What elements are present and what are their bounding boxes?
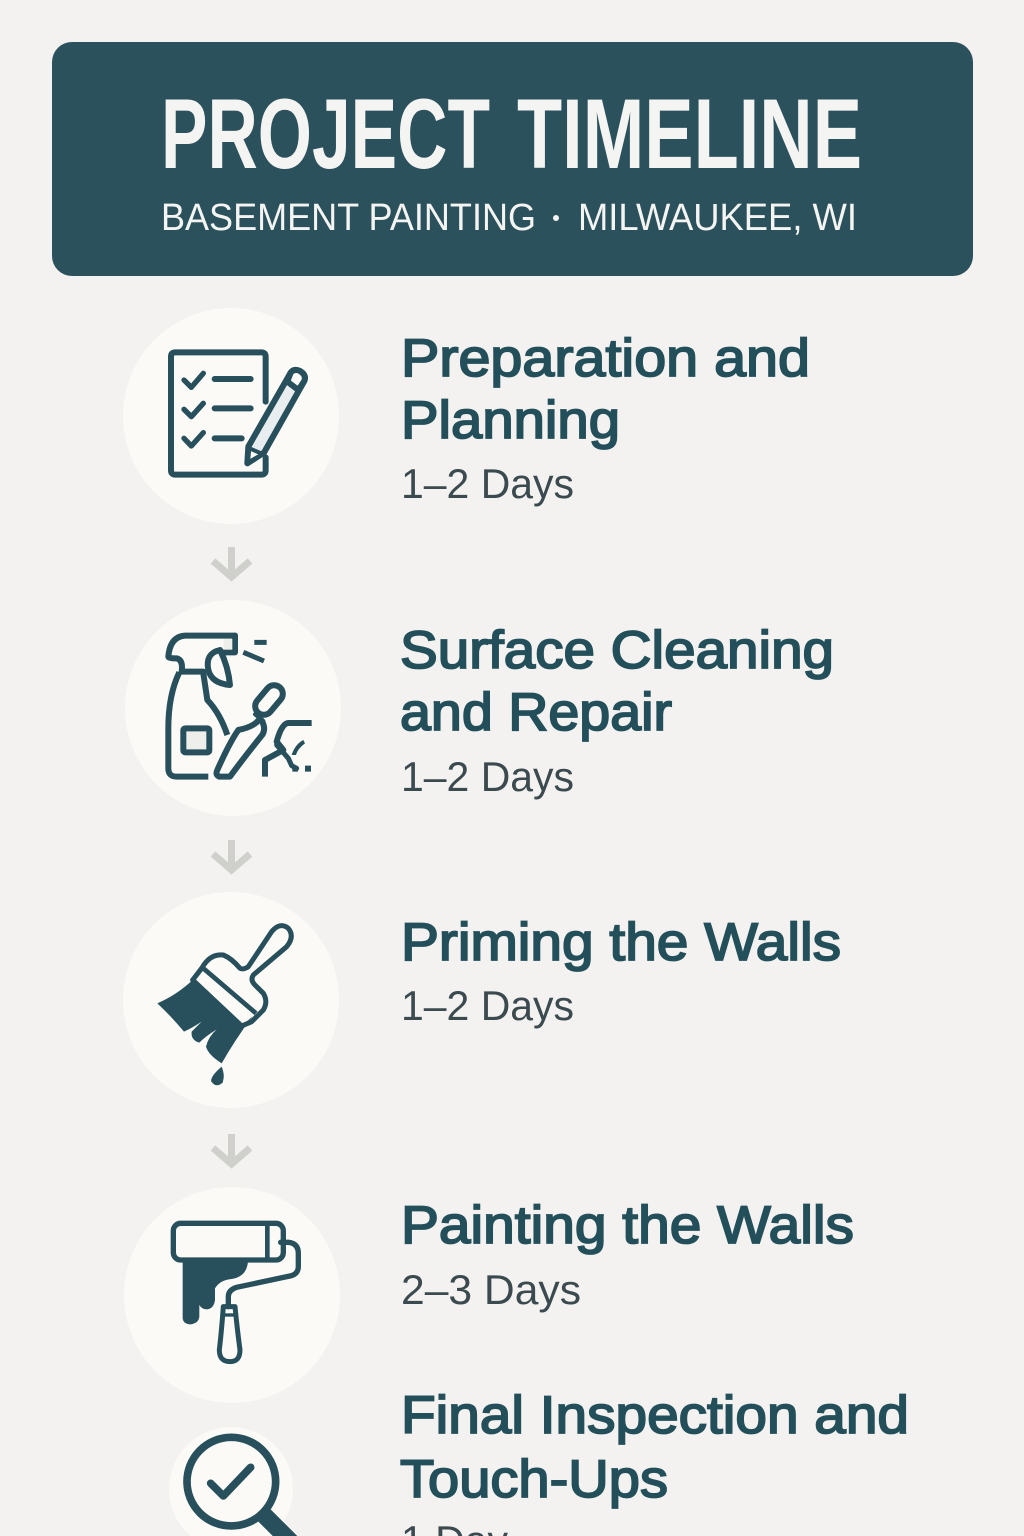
step 3: priming the walls — [123, 892, 841, 1108]
icon: magnifying glass with check — [169, 1427, 300, 1536]
heading: Surface Cleaning — [400, 621, 834, 680]
duration: 2–3 Days — [401, 1266, 581, 1313]
duration: 1–2 Days — [401, 460, 574, 507]
arrow 1 — [213, 547, 250, 577]
arrow 2 — [213, 840, 250, 870]
icon: paint roller — [124, 1187, 340, 1403]
heading: Priming the Walls — [401, 913, 841, 972]
heading: Final Inspection and — [401, 1386, 909, 1445]
icon: paint brush — [123, 892, 339, 1108]
step 5: final inspection and touch-ups — [169, 1386, 909, 1536]
duration: 1–2 Days — [401, 982, 574, 1029]
subtitle — [161, 197, 857, 239]
duration: 1–2 Days — [401, 753, 574, 800]
step 2: surface cleaning and repair — [125, 600, 834, 816]
title: PROJECT — [161, 78, 490, 189]
icon: checklist and pencil — [123, 308, 339, 524]
heading line 2: Planning — [401, 391, 620, 450]
title: TIMELINE — [517, 78, 862, 189]
heading: Painting the Walls — [401, 1196, 854, 1255]
heading line 2: and Repair — [400, 683, 672, 742]
subtitle: BASEMENT PAINTING — [161, 197, 536, 239]
heading line 2: Touch-Ups — [400, 1450, 668, 1509]
header banner — [52, 42, 973, 276]
title — [161, 78, 862, 189]
icon: spray bottle, scraper and crack — [125, 600, 341, 816]
step 1: preparation and planning — [123, 308, 810, 524]
subtitle: MILWAUKEE, WI — [578, 197, 857, 239]
arrow 3 — [213, 1134, 250, 1164]
step 4: painting the walls — [124, 1187, 854, 1403]
heading: Preparation and — [401, 329, 810, 388]
